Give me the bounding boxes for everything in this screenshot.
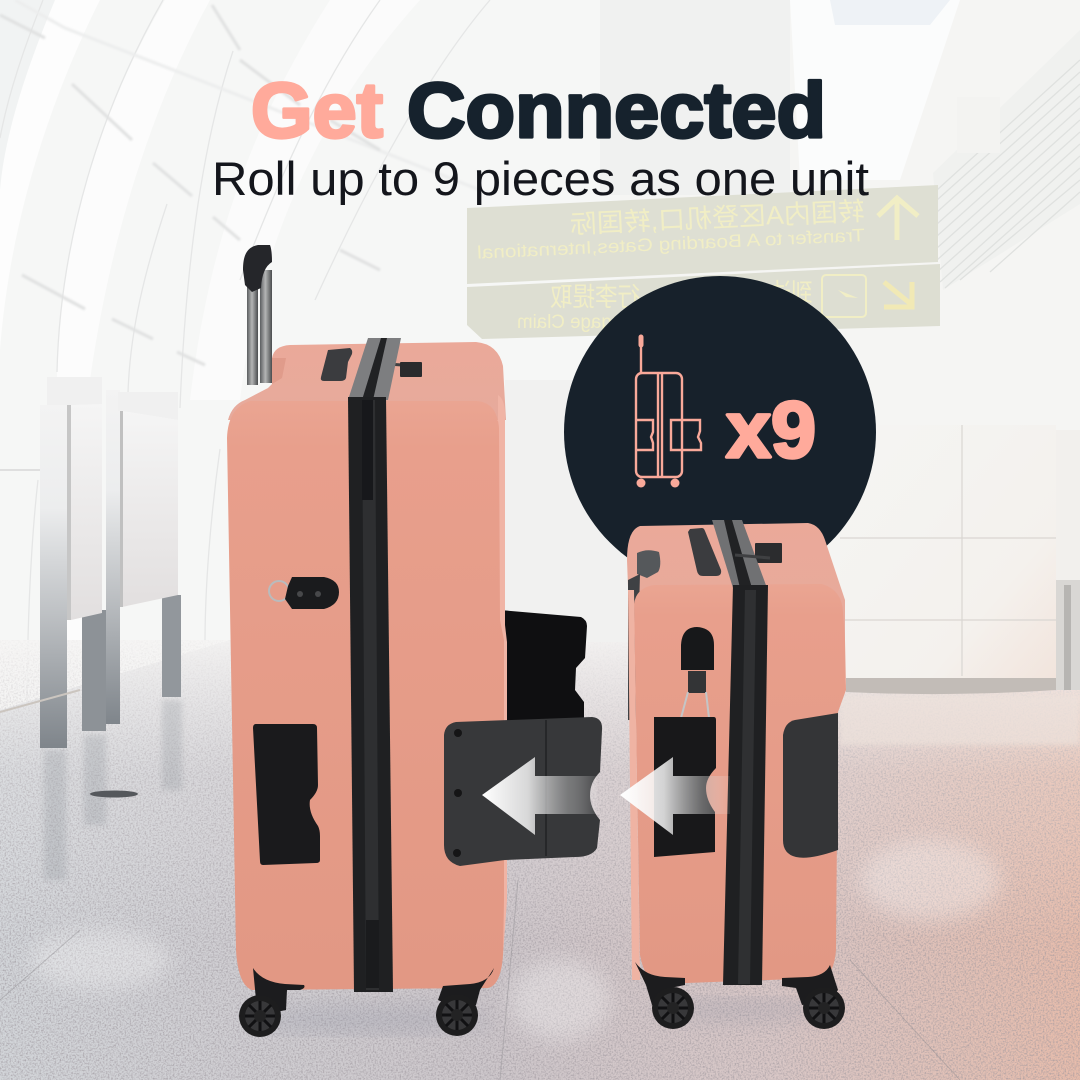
arrow: left arrow on small suitcase (620, 757, 730, 835)
arrow: left arrow on connector flap (482, 757, 597, 835)
sign text: mirrored Chinese and English (477, 196, 865, 333)
lock (755, 543, 782, 563)
label: x9: x9 (726, 385, 816, 474)
top grip (688, 528, 721, 576)
centre band and zipper (723, 585, 768, 985)
sign text: mirrored Chinese and English: Baggage Claim (517, 312, 645, 333)
telescoping handle (243, 245, 272, 385)
body (634, 584, 846, 984)
centre band top (348, 338, 401, 400)
retracted handle (628, 550, 660, 720)
heading word: Get: Get (251, 66, 383, 154)
small suitcase (627, 520, 846, 1029)
side flap (783, 713, 838, 858)
connector flap (444, 717, 602, 866)
top handle (321, 348, 352, 381)
sign text: mirrored Chinese and English: 到达 (769, 278, 813, 308)
floor glow patches (30, 840, 1000, 1040)
icon: connected suitcases (636, 334, 701, 488)
background: far corridor (505, 380, 630, 642)
velcro patch (253, 724, 320, 865)
title (212, 66, 869, 205)
sign text: mirrored Chinese and English: 转国内A区登机口,转国际 (569, 196, 865, 239)
rear edge (498, 395, 507, 955)
sign arrows (878, 198, 918, 240)
centre band and zipper (348, 397, 393, 992)
large suitcase (227, 245, 602, 1037)
background: mirrored airport sign (467, 185, 940, 339)
recess beside handle (272, 358, 286, 384)
lock and zipper pull (372, 362, 422, 377)
sign text: mirrored Chinese and English: 行李提取 (550, 282, 640, 312)
side tab with ring (269, 577, 339, 609)
sign text: mirrored Chinese and English: Transfer to A Boarding Gates,International (477, 225, 865, 263)
top face (228, 342, 506, 420)
hanging tab and clip (681, 627, 714, 718)
background: info kiosks on pillars (0, 377, 181, 748)
wheels (635, 962, 845, 1029)
background: glass roof (0, 0, 960, 714)
pillar reflections (44, 700, 182, 880)
body (227, 401, 504, 990)
background: polished floor (0, 640, 1080, 1080)
rear velcro flap (500, 610, 587, 724)
wheels (239, 968, 494, 1037)
top face (627, 523, 845, 640)
centre band top (712, 520, 767, 588)
suitcase floor shadows (250, 999, 835, 1034)
heading word: Connected: Connected (407, 66, 826, 154)
subheading: Roll up to 9 pieces as one unit (212, 152, 869, 205)
background: wall and ceiling on right (840, 30, 1080, 694)
badge: dark circle x9 (564, 276, 876, 588)
velcro patch (654, 717, 716, 857)
